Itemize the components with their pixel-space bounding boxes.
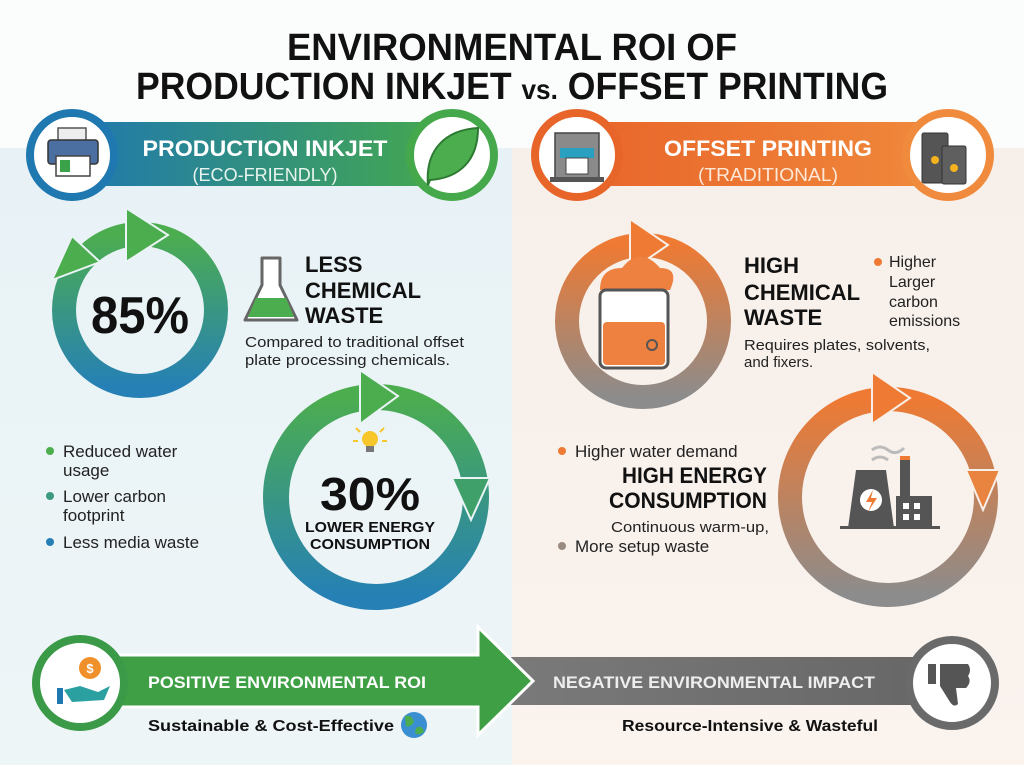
ring: 85%: 85%	[91, 287, 189, 345]
text: less chemical waste: Compared to traditional offset	[245, 334, 465, 351]
bullets: inkjet benefits	[46, 442, 199, 552]
heading text	[142, 136, 388, 185]
title: PRODUCTION INKJET vs. OFFSET PRINTING	[136, 66, 888, 108]
text: high energy consumption: More setup waste	[575, 537, 709, 556]
bullets: inkjet benefits: footprint	[63, 506, 125, 525]
heading text: PRODUCTION INKJET	[142, 136, 388, 161]
ring: 30%	[276, 370, 490, 597]
icon: beaker	[600, 256, 673, 368]
text: high chemical waste: HIGH	[744, 253, 799, 278]
ring: 30%: 30%	[320, 468, 420, 520]
banner: negative environmental impact: Resource-Intensive & Wasteful	[622, 718, 878, 735]
header: offset printing	[535, 113, 990, 197]
banner: positive environmental roi	[36, 627, 533, 738]
bullets: inkjet benefits: Lower carbon	[63, 487, 166, 506]
text: less chemical waste: CHEMICAL	[305, 278, 421, 303]
text: high energy consumption: Higher water demand	[575, 442, 738, 461]
icon: oil barrels	[922, 133, 966, 184]
header: production inkjet	[30, 113, 494, 197]
bullets: emissions: emissions	[889, 313, 960, 330]
banner: negative environmental impact: NEGATIVE ENVIRONMENTAL IMPACT	[553, 673, 876, 692]
icon: leaf	[428, 128, 478, 185]
icon: flask	[245, 258, 297, 320]
icon: thumbs down	[928, 664, 970, 706]
title	[136, 27, 888, 108]
bullets: inkjet benefits: Reduced water	[63, 442, 178, 461]
text: high energy consumption: HIGH ENERGY	[622, 463, 767, 488]
text: less chemical waste: LESS	[305, 252, 362, 277]
ring: 30%: CONSUMPTION	[310, 536, 430, 553]
bullets: emissions: carbon	[889, 294, 938, 311]
icon: hand with coin: $	[86, 661, 94, 676]
text: high chemical waste: and fixers.	[744, 354, 813, 371]
bullets: inkjet benefits: Less media waste	[63, 533, 199, 552]
banner: positive environmental roi: Sustainable & Cost-Effective	[148, 718, 394, 735]
text: high chemical waste: WASTE	[744, 305, 822, 330]
text: high chemical waste	[744, 253, 930, 371]
text: high energy consumption: Continuous warm-up,	[611, 519, 769, 536]
ring: 85%	[52, 208, 216, 386]
heading text: (ECO-FRIENDLY)	[192, 165, 338, 185]
text: high chemical waste: CHEMICAL	[744, 280, 860, 305]
text: high energy consumption	[558, 442, 769, 556]
text: less chemical waste: WASTE	[305, 303, 383, 328]
header: offset printing: OFFSET PRINTING	[664, 136, 872, 161]
bullets: emissions	[874, 254, 960, 330]
ring: high chemical waste	[567, 219, 719, 397]
icon: light bulb	[353, 428, 387, 452]
ring: 30%: LOWER ENERGY	[305, 519, 435, 536]
text: high chemical waste: Requires plates, solvents,	[744, 337, 930, 354]
icon: printer	[48, 128, 98, 176]
banner: positive environmental roi: POSITIVE ENVIRONMENTAL ROI	[148, 673, 426, 692]
text: high energy consumption: CONSUMPTION	[609, 488, 767, 513]
banner: negative environmental impact	[505, 640, 995, 735]
subheading: traditional: (TRADITIONAL)	[698, 165, 838, 185]
bullets: inkjet benefits: usage	[63, 461, 109, 480]
icon: hand with coin	[57, 657, 110, 704]
icon: offset press	[550, 133, 604, 182]
ring: high energy	[790, 372, 1000, 595]
bullets: emissions: Higher	[889, 254, 937, 271]
icon: globe	[401, 712, 427, 738]
text: less chemical waste	[245, 252, 465, 369]
bullets: emissions: Larger	[889, 274, 936, 291]
icon: power plant	[840, 447, 940, 529]
title: ENVIRONMENTAL ROI OF	[287, 27, 737, 69]
text: less chemical waste: plate processing chemicals.	[245, 352, 450, 369]
